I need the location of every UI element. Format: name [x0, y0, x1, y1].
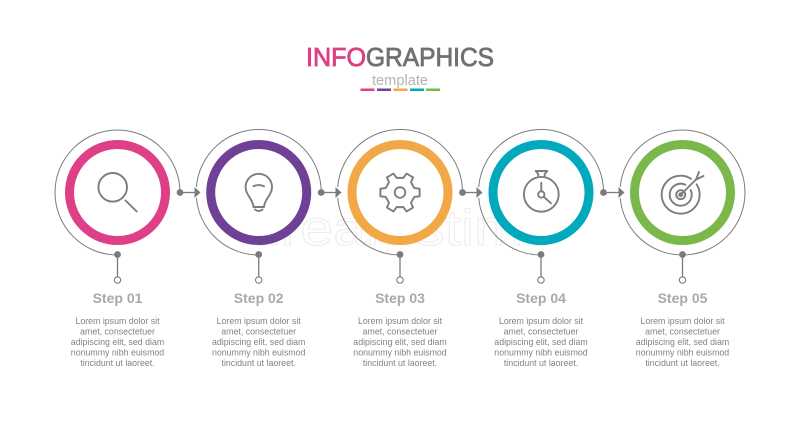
step 4 outer arc: [479, 129, 604, 255]
step 2 text: amet, consectetuer: [221, 326, 296, 336]
step 5 text: tincidunt ut laoreet.: [645, 358, 720, 368]
step 4 text: amet, consectetuer: [504, 326, 578, 336]
step 4: [479, 129, 624, 368]
step 1 text: Lorem ipsum dolor sit: [75, 316, 160, 326]
arrow 3 to 4: [459, 187, 482, 198]
icon: magnifier: [98, 173, 137, 212]
step 4 heading: Step 04: [516, 290, 566, 306]
step 2 text: [212, 316, 305, 368]
step 1 text: amet, consectetuer: [80, 326, 155, 336]
step 5 ring: [634, 144, 730, 240]
step 2 text: adipiscing elit, sed diam: [212, 337, 305, 347]
step 1 text: adipiscing elit, sed diam: [71, 337, 164, 347]
step 5 text: nonummy nibh euismod: [636, 348, 729, 358]
step 4 ring: [493, 144, 589, 240]
step 1 text: [71, 316, 164, 368]
icon: stopwatch: [524, 171, 559, 212]
step 3 text: nonummy nibh euismod: [353, 348, 447, 358]
icon: gear: [380, 174, 420, 211]
step 3 text: [353, 316, 447, 368]
step 2 heading: Step 02: [234, 290, 284, 306]
title: [306, 44, 494, 72]
step 1 text: nonummy nibh euismod: [71, 348, 164, 358]
step 1: [55, 130, 201, 368]
step 1 text: tincidunt ut laoreet.: [80, 358, 155, 368]
step 3 outer arc: [338, 129, 463, 255]
step 3 text: amet, consectetuer: [363, 326, 437, 336]
step 1 connector down: [114, 251, 121, 283]
step 3 text: tincidunt ut laoreet.: [363, 358, 437, 368]
step 2: [196, 129, 342, 368]
step 1 heading: Step 01: [93, 290, 143, 306]
step 5 connector down: [679, 251, 686, 283]
step 5 text: Lorem ipsum dolor sit: [640, 316, 725, 326]
step 3 heading: Step 03: [375, 290, 425, 306]
colour key bars: [360, 88, 440, 91]
step 5 text: adipiscing elit, sed diam: [636, 337, 729, 347]
step 4 connector down: [538, 251, 544, 283]
step 3 text: adipiscing elit, sed diam: [353, 337, 447, 347]
step 4 text: nonummy nibh euismod: [494, 348, 588, 358]
step 3 connector down: [397, 251, 403, 283]
step 4 text: Lorem ipsum dolor sit: [499, 316, 584, 326]
step 1 outer arc: [55, 130, 180, 255]
title: INFO: [306, 44, 366, 72]
step 3: [338, 129, 482, 368]
step 3 text: Lorem ipsum dolor sit: [358, 316, 443, 326]
step 4 text: [494, 316, 588, 368]
step 2 connector down: [255, 251, 262, 283]
title: GRAPHICS: [366, 44, 494, 72]
step 2 text: nonummy nibh euismod: [212, 348, 305, 358]
step 2 ring: [211, 144, 307, 240]
step 2 text: tincidunt ut laoreet.: [222, 358, 296, 368]
watermark: dreamstime: [248, 200, 556, 256]
icon: target: [662, 172, 704, 214]
step 4 text: adipiscing elit, sed diam: [494, 337, 588, 347]
step 1 ring: [70, 144, 166, 240]
icon: light bulb: [246, 174, 272, 211]
step 5 text: [636, 316, 729, 368]
arrow 4 to 5: [600, 187, 624, 198]
arrow 1 to 2: [177, 187, 200, 198]
step 2 text: Lorem ipsum dolor sit: [217, 316, 301, 326]
step 5 heading: Step 05: [658, 290, 708, 306]
arrow 2 to 3: [318, 187, 342, 198]
step 5: [620, 130, 745, 368]
step 2 outer arc: [196, 129, 321, 255]
step 5 text: amet, consectetuer: [645, 326, 720, 336]
step 5 outer circle: [620, 130, 745, 255]
step 4 text: tincidunt ut laoreet.: [504, 358, 578, 368]
step 3 ring: [352, 144, 448, 240]
subtitle: template: [372, 73, 428, 89]
